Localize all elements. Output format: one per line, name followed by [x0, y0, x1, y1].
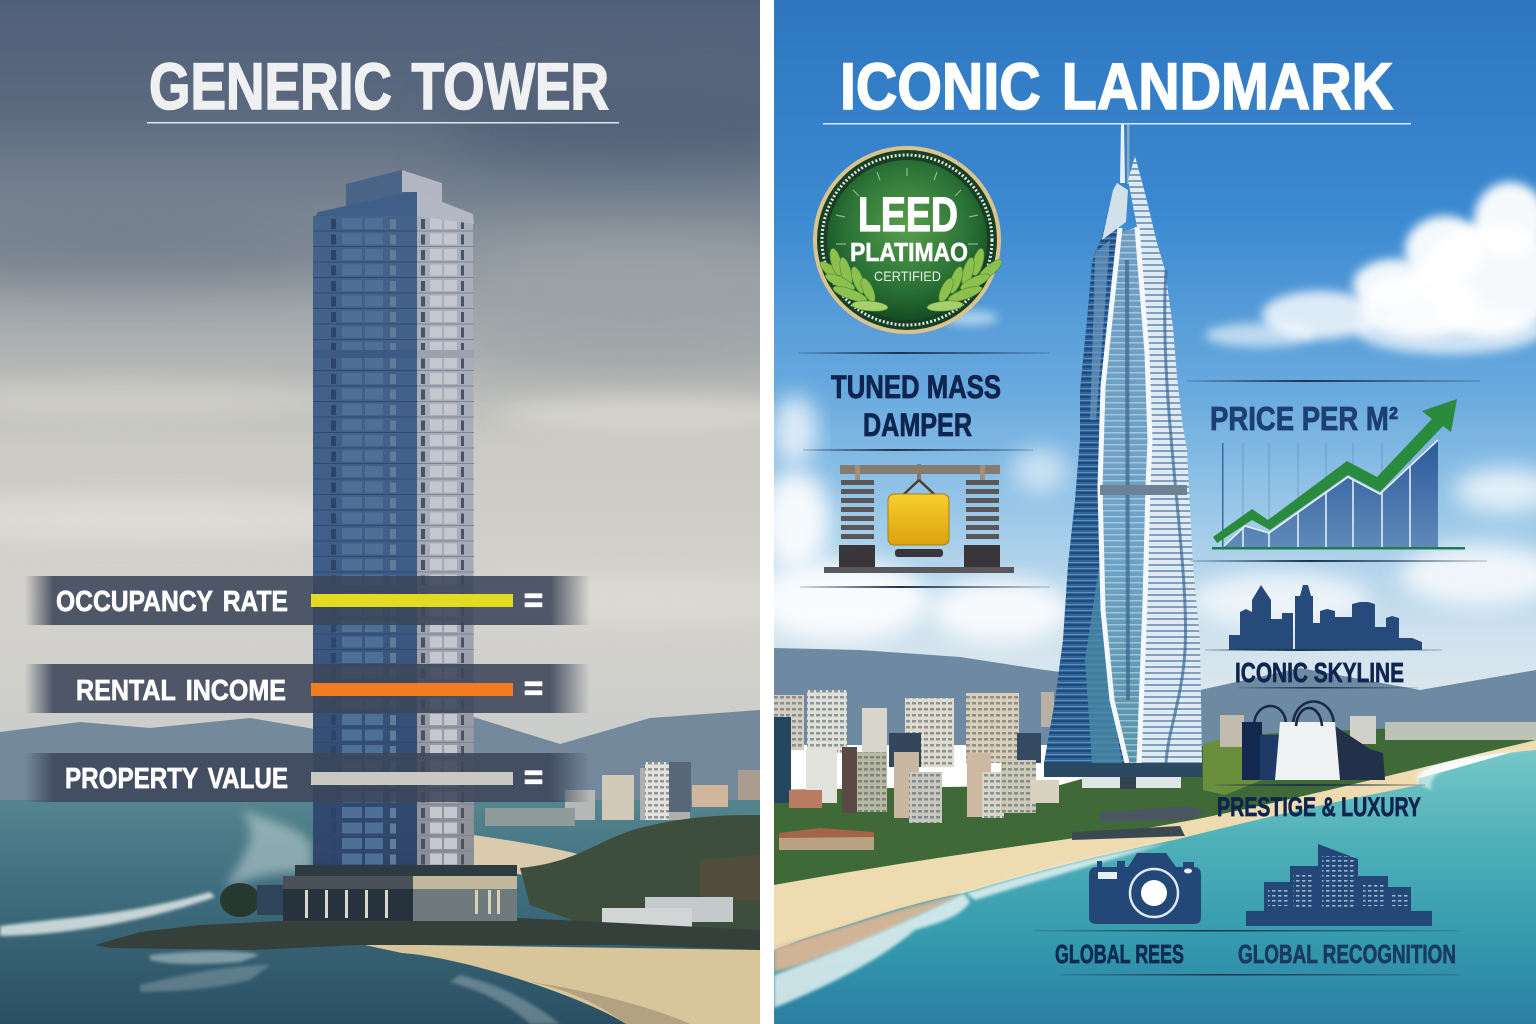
- section: iconic skyline: [1205, 585, 1442, 688]
- beach: [774, 740, 1536, 948]
- badge: LEED Platimao certified: CERTIFIED: [874, 268, 941, 284]
- panel: generic tower: [0, 0, 840, 1024]
- beach: [360, 944, 760, 1024]
- title: generic tower: GENERIC TOWER: [149, 49, 609, 123]
- sea: [0, 800, 760, 1024]
- metric row: occupancy rate: OCCUPANCY RATE: [56, 586, 288, 618]
- floor transoms: [313, 350, 474, 593]
- shallows and waves: [0, 810, 560, 1024]
- metric row: rental income: RENTAL INCOME: [76, 675, 286, 707]
- icon: city buildings: [1246, 844, 1432, 926]
- blue sky with clouds: [750, 0, 1536, 730]
- panel: iconic landmark: [750, 0, 1536, 1024]
- section: global recognition: [1060, 844, 1460, 976]
- section: price per m2 chart: PRICE PER M²: [1210, 400, 1398, 437]
- section: global recognition: GLOBAL RECOGNITION: [1238, 939, 1456, 969]
- section: tuned mass damper: [798, 352, 1050, 588]
- town on the shore: [474, 762, 760, 932]
- section: prestige and luxury: PRESTIGE & LUXURY: [1217, 792, 1421, 822]
- metric row: rental income: =: [524, 670, 543, 706]
- metric row: property value: =: [524, 759, 543, 795]
- section: prestige and luxury: [1215, 702, 1425, 822]
- podium: [1044, 763, 1202, 789]
- title: iconic landmark: ICONIC LANDMARK: [840, 49, 1393, 123]
- central glass: [1102, 228, 1148, 763]
- landmark skyscraper: [1044, 124, 1202, 789]
- distant mountains: [774, 648, 1536, 745]
- metric row: property value: [25, 753, 590, 802]
- roof crown: [346, 170, 442, 206]
- section: price per m2 chart: [1187, 380, 1487, 562]
- crown: [1102, 183, 1128, 240]
- icon: damper diagram: [824, 464, 1014, 573]
- waterfront city: [774, 690, 1536, 885]
- badge: LEED Platimao certified: PLATIMAO: [850, 237, 968, 267]
- badge: LEED Platimao certified: [813, 146, 1005, 334]
- spires: [1120, 124, 1125, 183]
- metric row: occupancy rate: =: [524, 582, 543, 618]
- metric row: rental income: [25, 664, 590, 713]
- podium base: [257, 865, 517, 921]
- distant mountains: [0, 710, 760, 800]
- section: global rees: [1035, 853, 1460, 969]
- laurel leaves: [817, 247, 1005, 313]
- metric row: property value: PROPERTY VALUE: [65, 763, 288, 795]
- icon: green growth arrow: [1213, 399, 1457, 543]
- white fins: [1100, 228, 1127, 763]
- metric row: occupancy rate: [25, 576, 590, 625]
- surf: [774, 748, 1536, 1008]
- right face: [417, 192, 474, 868]
- left face: [313, 216, 417, 868]
- right white wing: [1128, 156, 1202, 763]
- section: global rees: GLOBAL REES: [1055, 939, 1184, 969]
- rocky shoreline: [95, 918, 760, 950]
- overcast sky: [0, 0, 760, 744]
- section: tuned mass damper: TUNED MASS: [831, 369, 1001, 405]
- icon: city skyline: [1229, 585, 1422, 650]
- tower building: [257, 170, 517, 921]
- bar area chart: [1212, 440, 1465, 550]
- badge: LEED Platimao certified: LEED: [858, 189, 958, 242]
- icon: shopping bags: [1242, 702, 1385, 780]
- left dark wing: [1044, 190, 1125, 763]
- icon: camera: [1089, 853, 1201, 924]
- section: tuned mass damper: DAMPER: [863, 407, 972, 443]
- trees by the base: [220, 883, 260, 917]
- sea: [774, 745, 1536, 1024]
- mid band: [1100, 485, 1187, 495]
- section: iconic skyline: ICONIC SKYLINE: [1235, 657, 1404, 688]
